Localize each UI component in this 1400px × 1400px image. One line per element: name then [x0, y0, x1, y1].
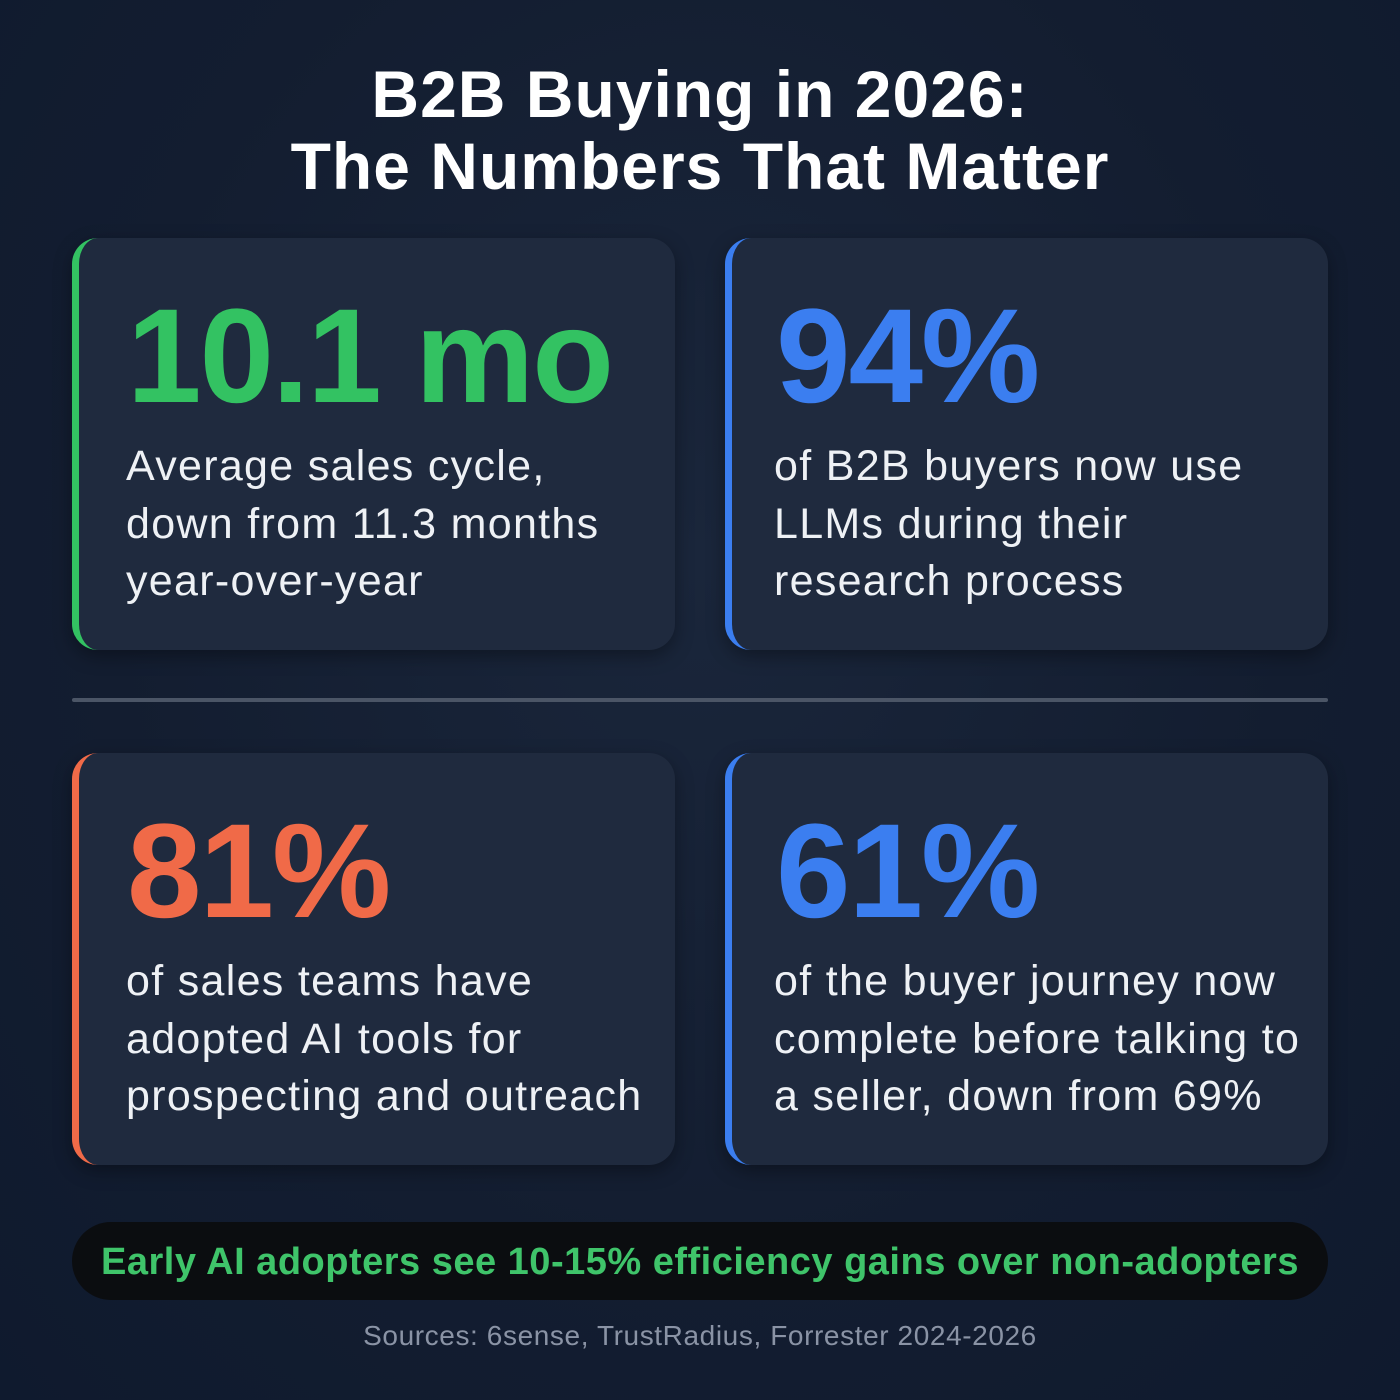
text: buyer journey description: a seller, down from 69%: [774, 1072, 1263, 1120]
sources: Sources: 6sense, TrustRadius, Forrester 2024-2026: [363, 1320, 1037, 1351]
title: The Numbers That Matter: [291, 129, 1109, 203]
panel: sales cycle: [72, 238, 675, 650]
stat: 81%: 81%: [127, 797, 389, 946]
text: sales cycle description: [126, 442, 599, 605]
text: AI tools description: adopted AI tools for: [126, 1014, 523, 1062]
text: LLM description: [774, 442, 1244, 605]
text: LLM description: LLMs during their: [774, 500, 1128, 548]
text: buyer journey description: of the buyer journey now: [774, 957, 1276, 1005]
text: AI tools description: prospecting and outreach: [126, 1072, 642, 1120]
text: buyer journey description: complete before talking to: [774, 1014, 1300, 1062]
text: buyer journey description: [774, 957, 1300, 1120]
title: [291, 57, 1109, 203]
panel: buyer journey: [725, 753, 1328, 1165]
callout: efficiency gains: [72, 1222, 1328, 1300]
text: AI tools description: of sales teams have: [126, 957, 533, 1005]
callout: efficiency gains: Early AI adopters see 10-15% efficiency gains over non-adopters: [101, 1241, 1299, 1283]
stat: 61%: 61%: [776, 797, 1038, 946]
panel: AI tools adoption: [72, 753, 675, 1165]
stat: 94%: 94%: [776, 282, 1038, 431]
text: LLM description: of B2B buyers now use: [774, 442, 1244, 490]
title: B2B Buying in 2026:: [371, 57, 1029, 131]
text: sales cycle description: year-over-year: [126, 557, 424, 605]
text: sales cycle description: down from 11.3 months: [126, 500, 599, 548]
text: AI tools description: [126, 957, 642, 1120]
panel: LLM use: [725, 238, 1328, 650]
stat: 10.1 mo: 10.1 mo: [127, 282, 612, 431]
text: sales cycle description: Average sales cycle,: [126, 442, 546, 490]
text: LLM description: research process: [774, 557, 1125, 605]
